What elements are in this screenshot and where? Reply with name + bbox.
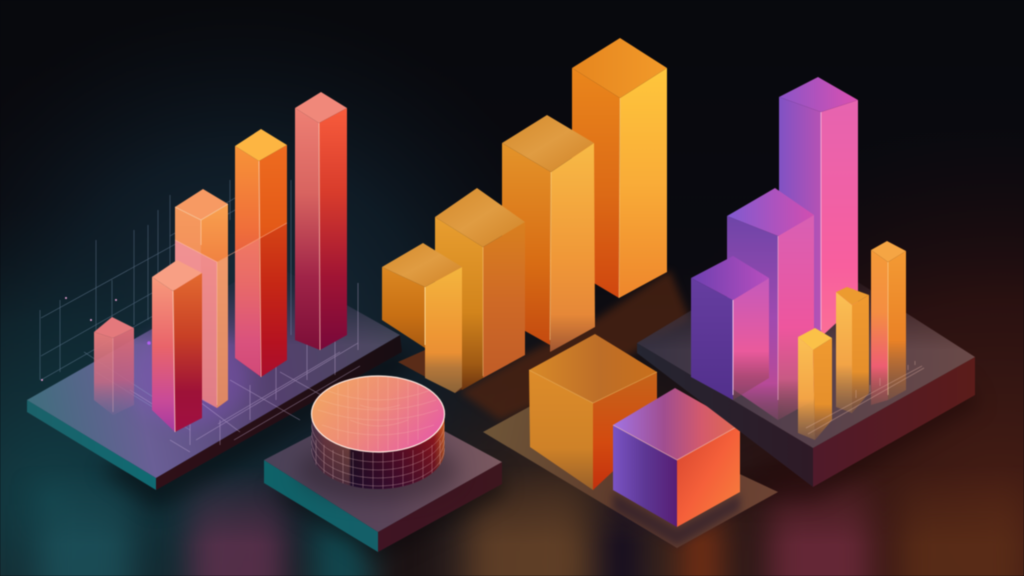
orange cube: [529, 334, 657, 490]
big purple bar: [779, 77, 858, 340]
orange bar A: [382, 243, 462, 393]
panel: cylinder chart: [264, 376, 502, 552]
cube platform: [483, 390, 778, 548]
left platform: [27, 262, 402, 490]
floor shadows: [100, 345, 980, 560]
bar 1: [94, 317, 134, 415]
orange platform: [398, 270, 690, 420]
bar 4: [217, 129, 287, 377]
data points: [41, 297, 151, 381]
floor grid lines: [130, 283, 360, 452]
small purple bar: [691, 256, 769, 400]
purple cube: [613, 388, 740, 546]
cylinder: [298, 376, 458, 502]
baseline chart lines: [806, 361, 924, 434]
floor reflections: [33, 476, 1024, 576]
panel: right purple chart: [637, 77, 975, 487]
right platform: [636, 283, 976, 487]
orange bar B: [435, 188, 525, 390]
panel: left bar chart: [27, 92, 402, 490]
panel: orange rising bars: [382, 38, 690, 420]
tall orange bar: [871, 241, 906, 405]
orange bar D: [572, 38, 667, 298]
middle purple bar: [727, 188, 814, 420]
background wireframe grid: [40, 180, 291, 430]
bar 2: [152, 260, 202, 432]
medium orange bar: [836, 287, 869, 413]
cylinder platform: [264, 398, 502, 552]
short orange bar: [798, 328, 832, 440]
bar 5: [295, 92, 347, 350]
bar 3: [175, 189, 228, 408]
orange bar C: [502, 115, 595, 352]
panel: cubes: [483, 334, 778, 548]
